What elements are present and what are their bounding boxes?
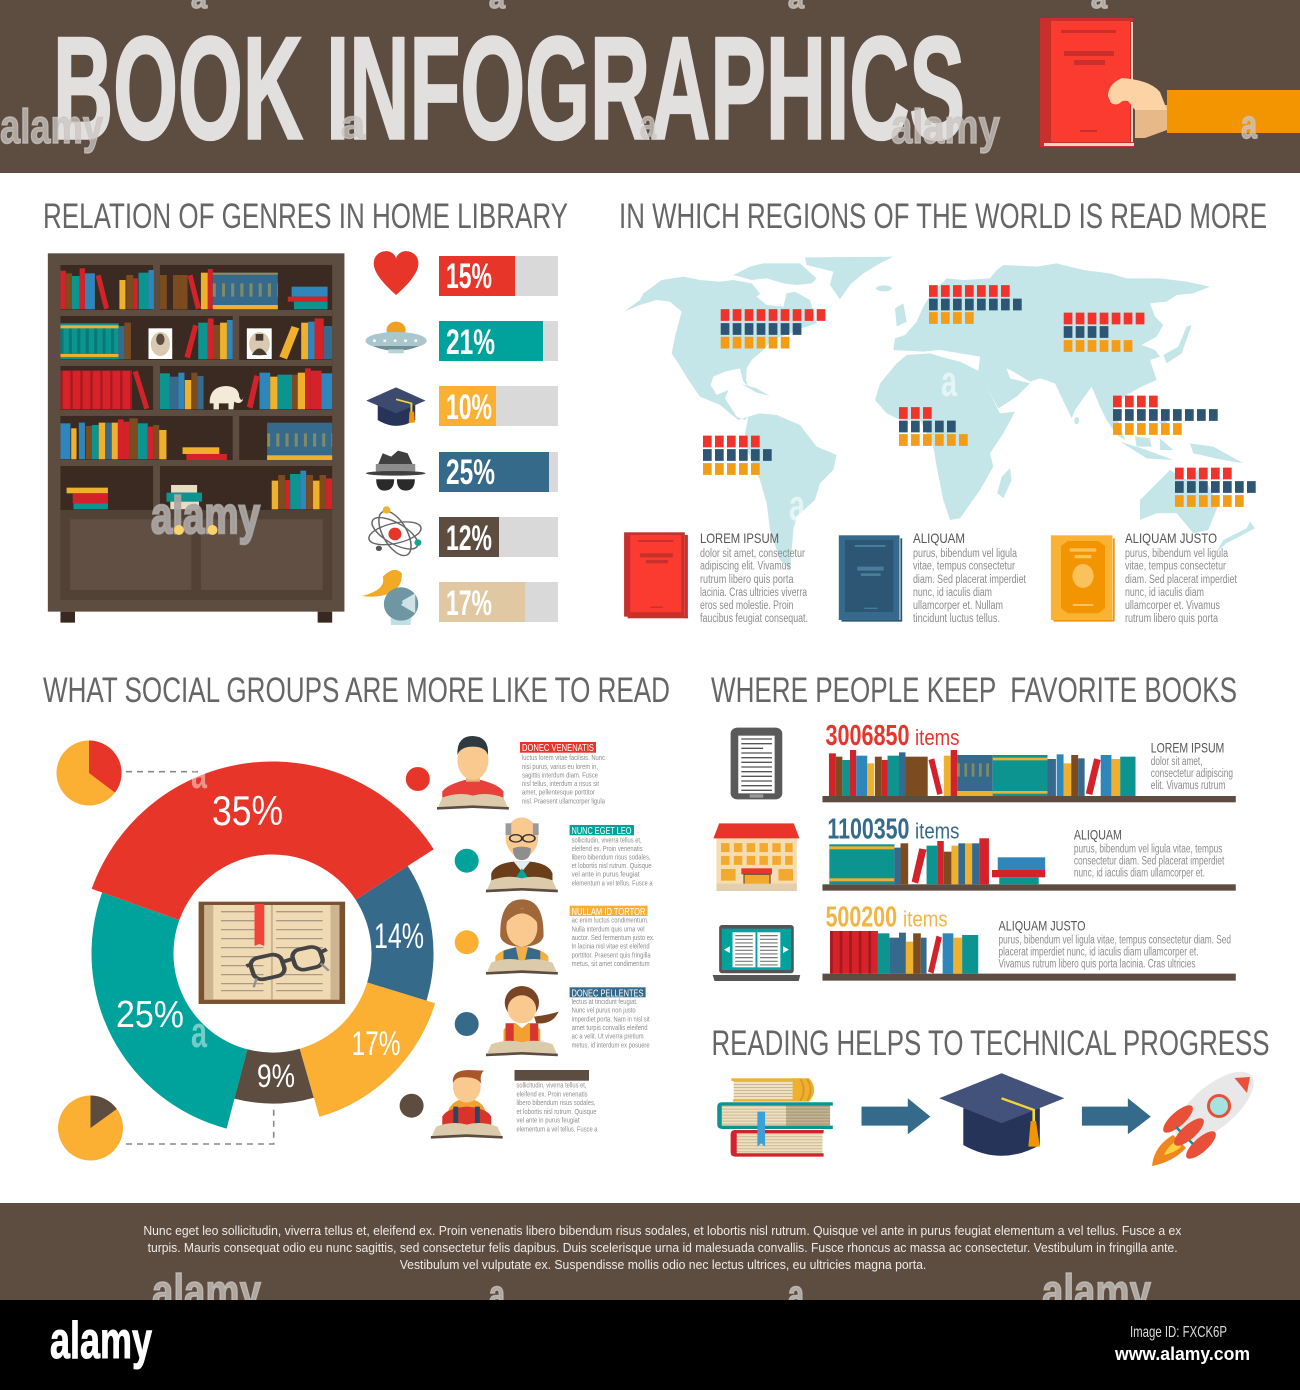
- text block: brown label: sollicitudin, viverra tellus et,: [516, 1081, 586, 1090]
- legend text: lorem ipsum: eros sed molestie. Proin: [700, 600, 794, 612]
- legend text: aliquam: ALIQUAM: [913, 530, 965, 546]
- text block: brown label: eleifend ex. Proin venenatis: [516, 1090, 588, 1099]
- icon: atom: [366, 506, 424, 560]
- count: 1100350 items: items: [915, 818, 960, 843]
- map watermarks: a: [941, 357, 957, 406]
- marker dots: [400, 767, 479, 1118]
- legend text: aliquam: ullamcorper et. Nullam: [913, 600, 1003, 612]
- text block: donec venenatis: nisl. Praesent ullamcorper ligula: [522, 796, 606, 805]
- books row 1: [60, 268, 328, 309]
- text block: donec venenatis: nisi purus, varius eu lorem in,: [522, 762, 598, 771]
- legend text: lorem ipsum: adipiscing elit. Vivamus: [700, 560, 791, 572]
- legend text: aliquam justo: vitae, tempus consectetur: [1125, 560, 1226, 572]
- segment 25%: [92, 892, 247, 1129]
- icon: city library: [713, 823, 800, 891]
- map data: africa: [899, 413, 968, 440]
- shelf text: aliquam: purus, bibendum vel ligula vitae, tempus: [1074, 843, 1223, 855]
- footer band: [0, 1203, 1300, 1319]
- alamy logo: alamy: [50, 1312, 152, 1370]
- text block: donec venenatis: DONEC VENENATIS: [522, 743, 594, 754]
- legend text: aliquam justo: diam. Sed placerat imperdiet: [1125, 574, 1238, 586]
- shelf text: lorem ipsum: elit. Vivamus rutrum: [1151, 780, 1225, 792]
- text block: nunc eget leo: NUNC EGET LEO: [572, 826, 632, 837]
- footer watermarks: [152, 1266, 1151, 1319]
- text block: nullam id tortor: metus, sit amet condimentum: [572, 959, 650, 968]
- text block: nullam id tortor: ac enim luctus condimentum.: [572, 916, 649, 925]
- donut watermarks: a: [191, 1008, 207, 1057]
- donut watermarks: [191, 749, 207, 1057]
- legend text: aliquam: tincidunt luctus tellus.: [913, 613, 1000, 625]
- donut watermarks: a: [191, 749, 207, 798]
- count: 500200 items: 500200: [826, 902, 897, 934]
- icon: knight helmet: [362, 570, 418, 625]
- icon: laptop e-book: [713, 925, 800, 981]
- shelf text: aliquam justo: ALIQUAM JUSTO: [998, 918, 1086, 934]
- map data: australia: [1175, 474, 1256, 501]
- shelf text: aliquam justo: Vivamus rutrum libero quis porta lacinia. Cras ultricies: [998, 958, 1196, 970]
- segment 17%: [300, 982, 435, 1117]
- shelf text: aliquam: [1074, 826, 1225, 880]
- bar: fantasy 17%: [439, 582, 558, 623]
- count: 500200 items: items: [903, 907, 948, 932]
- legend text: aliquam: purus, bibendum vel ligula: [913, 548, 1017, 560]
- bar: detective 25%: 25%: [446, 453, 495, 492]
- person: elderly man: [486, 817, 558, 892]
- shelf text: aliquam: consectetur diam. Sed placerat imperdiet: [1074, 855, 1225, 867]
- legend text: aliquam justo: rutrum libero quis porta: [1125, 613, 1218, 625]
- text block: brown label: et lobortis nisl rutrum. Quisque: [516, 1107, 596, 1116]
- text block: brown label: elementum a vel tellus. Fusce a: [516, 1124, 598, 1133]
- bar: science 12%: [439, 517, 558, 558]
- legend books: [624, 532, 1115, 622]
- text block: donec pellentes: imperdiet porta. Nam in nisl sit: [572, 1014, 650, 1023]
- legend text: lorem ipsum: LOREM IPSUM: [700, 530, 779, 546]
- icon: red book: [624, 532, 688, 618]
- text block: nullam id tortor: NULLAM ID TORTOR: [572, 907, 646, 918]
- credit bar: [0, 1300, 1300, 1390]
- icon: rocket: [1152, 1060, 1265, 1166]
- shelf text: aliquam: ALIQUAM: [1074, 826, 1122, 842]
- small pie: top: [56, 740, 122, 806]
- text block: donec venenatis: nisl tellus, interdum a risus sit: [522, 779, 600, 788]
- text block: nullam id tortor: auctor. Sed fermentum justo ex.: [572, 933, 655, 942]
- header band: [0, 0, 1300, 173]
- bar: sci-fi 21%: 21%: [446, 323, 495, 362]
- bar: education 10%: 10%: [446, 388, 492, 427]
- footer watermarks: alamy: [152, 1266, 261, 1319]
- donut chart: [92, 761, 435, 1129]
- legend text: aliquam justo: ALIQUAM JUSTO: [1125, 530, 1217, 546]
- genre bars panel: [439, 256, 558, 623]
- icon: blue book: [839, 535, 902, 622]
- count: 3006850 items: 3006850: [826, 720, 910, 752]
- map watermarks: a: [789, 481, 805, 530]
- legend text: aliquam: [913, 530, 1027, 625]
- icon: open book with glasses: [199, 902, 345, 1004]
- text block: brown label: vel ante in purus feugiat: [516, 1116, 580, 1125]
- americas: [624, 257, 893, 570]
- text block: donec pellentes: DONEC PELLENTES: [572, 988, 644, 999]
- text block: nunc eget leo: sollicitudin, viverra tellus et,: [572, 835, 642, 844]
- watermarks: a: [1241, 103, 1258, 147]
- shelf 2: [822, 838, 1236, 891]
- icon: e-reader: [731, 728, 782, 799]
- shelf 3: [822, 931, 1236, 981]
- shelf text: lorem ipsum: consectetur adipiscing: [1151, 768, 1233, 780]
- shelf text: aliquam justo: placerat imperdiet nunc, id iaculis diam ullamcorper et.: [998, 946, 1198, 958]
- text block: nullam id tortor: Nulla interdum quis urna vel: [572, 924, 645, 933]
- text block: nunc eget leo: elementum a vel tellus. Fusce a: [572, 878, 653, 887]
- shelf text: lorem ipsum: LOREM IPSUM: [1151, 739, 1224, 755]
- person portraits: [431, 736, 559, 1139]
- legend text: lorem ipsum: lacinia. Cras ultricies viverra: [700, 587, 807, 599]
- icon: heart: [374, 251, 418, 295]
- footer watermarks: a: [788, 1273, 805, 1317]
- heading: genres: RELATION OF GENRES IN HOME LIBRARY: [43, 197, 568, 236]
- segment 35%: 35%: [212, 787, 283, 834]
- count: 3006850 items: items: [915, 725, 960, 750]
- map data: south-east asia: [1113, 402, 1218, 429]
- shelf text: aliquam justo: [998, 918, 1231, 970]
- segment 25%: 25%: [116, 994, 184, 1036]
- bar: love 15%: 15%: [446, 257, 492, 296]
- legend text: aliquam: nunc, id iaculis diam: [913, 587, 992, 599]
- text block: nunc eget leo: et lobortis nisl rutrum. Quisque: [572, 861, 652, 870]
- text block: donec pellentes: Nunc vel purus non justo: [572, 1006, 636, 1015]
- segment 17%: 17%: [352, 1025, 400, 1063]
- legend text: lorem ipsum: rutrum libero quis porta: [700, 574, 794, 586]
- legend text: lorem ipsum: faucibus feugiat consequat.: [700, 613, 808, 625]
- watermarks: a: [640, 103, 657, 147]
- footer text: [143, 1223, 1182, 1272]
- person: young man: [437, 736, 509, 810]
- bar: sci-fi 21%: [439, 321, 558, 362]
- segment 9%: [234, 1049, 314, 1104]
- footer text: turpis. Mauris consequat odio eu nunc sagittis, sed consectetur felis dapibus. Duis scelerisque urna id malesuada convallis. Fusce rhoncus ac massa ac consectetur. Vestibulum in fringilla ante.: [148, 1240, 1178, 1255]
- text block: nullam id tortor: [570, 906, 655, 968]
- icon: ufo: [365, 322, 427, 353]
- person: schoolgirl: [486, 986, 559, 1056]
- icon: hand holding red book: [1040, 18, 1300, 147]
- site url: www.alamy.com: [1114, 1344, 1250, 1364]
- shelf text: aliquam: nunc, id iaculis diam ullamcorper et.: [1074, 868, 1205, 880]
- legend text: lorem ipsum: dolor sit amet, consectetur: [700, 548, 805, 560]
- text block: donec venenatis: luctus lorem vitae facilisis. Nunc: [522, 753, 605, 762]
- text block: nunc eget leo: [570, 825, 653, 887]
- world map: [624, 257, 1255, 570]
- arrow 2: [1082, 1098, 1151, 1134]
- progress row: [717, 1073, 1151, 1157]
- map watermarks: [789, 357, 957, 530]
- legend text: aliquam justo: ullamcorper et. Vivamus: [1125, 600, 1220, 612]
- shelf text: lorem ipsum: [1151, 739, 1233, 792]
- legend text: aliquam justo: purus, bibendum vel ligula: [1125, 548, 1228, 560]
- text block: donec venenatis: sagittis interdum diam. Fusce: [522, 770, 598, 780]
- segment 35%: [92, 761, 434, 920]
- footer text: Nunc eget leo sollicitudin, viverra tellus et, eleifend ex. Proin venenatis libero bibendum risus sodales, et lobortis nisl rutrum. Quisque vel ante in purus feugiat elementum a vel tellus. Fusce a ex: [143, 1223, 1182, 1238]
- watermarks: [0, 0, 1258, 154]
- bar: love 15%: [439, 256, 558, 296]
- shelf text: lorem ipsum: dolor sit amet,: [1151, 756, 1202, 768]
- footer watermarks: a: [489, 1273, 506, 1317]
- heading: social groups: WHAT SOCIAL GROUPS ARE MORE LIKE TO READ: [43, 671, 670, 710]
- icon: graduation cap: [939, 1073, 1064, 1156]
- icon: spy: [366, 451, 426, 491]
- genre icons: [362, 251, 427, 625]
- person: schoolboy: [431, 1070, 503, 1139]
- count: 1100350 items: 1100350: [827, 813, 909, 845]
- text block: donec pellentes: lectus at tincidunt feugiat.: [572, 997, 638, 1006]
- text block: donec pellentes: metus, id interdum ex posuere: [572, 1040, 650, 1049]
- shelf 1: [822, 750, 1236, 802]
- text block: nunc eget leo: vel ante in purus feugiat: [572, 870, 640, 879]
- segment 14%: 14%: [374, 917, 424, 956]
- icon: stack of books: [717, 1078, 833, 1157]
- person: woman: [486, 899, 558, 975]
- legend text: aliquam: diam. Sed placerat imperdiet: [913, 574, 1027, 586]
- small pie: bottom: [58, 1096, 123, 1160]
- watermarks: a: [341, 103, 366, 147]
- cabinet knobs: [174, 525, 218, 535]
- text block: donec venenatis: amet, pellentesque porttitor: [522, 788, 595, 797]
- watermarks: alamy: [0, 101, 103, 154]
- footer watermarks: alamy: [1042, 1266, 1151, 1319]
- text block: donec venenatis: [520, 742, 606, 805]
- watermarks: alamy: [891, 101, 1000, 154]
- bar: detective 25%: [439, 452, 558, 492]
- text block: nunc eget leo: eleifend ex. Proin venenatis: [572, 844, 643, 853]
- map data: europe: [929, 291, 1022, 318]
- map data: south america: [703, 442, 772, 469]
- books row 5: [67, 471, 332, 509]
- books row 2: [60, 318, 332, 359]
- icon: graduation cap: [366, 387, 426, 426]
- legend text: aliquam justo: [1125, 530, 1238, 625]
- bookcase illustration: [48, 253, 344, 623]
- bookcase watermark: alamy: [151, 487, 260, 545]
- bar: science 12%: 12%: [446, 519, 492, 558]
- africa eurasia oceania: [875, 263, 1255, 552]
- text block: nunc eget leo: libero bibendum risus sodales,: [572, 852, 651, 861]
- books row 3: [60, 368, 332, 409]
- bar: fantasy 17%: 17%: [446, 584, 492, 623]
- legend text: lorem ipsum: [700, 530, 808, 625]
- footer text: Vestibulum vel vulputate ex. Suspendisse mollis odio nec lectus ultrices, eu ultricies magna porta.: [400, 1257, 926, 1272]
- text block: brown label: [514, 1070, 598, 1133]
- legend text: aliquam: vitae, tempus consectetur: [913, 560, 1015, 572]
- image id: Image ID: FXCK6P: [1130, 1324, 1227, 1341]
- map data: north america: [721, 315, 825, 343]
- icon: orange book: [1051, 535, 1115, 622]
- books row 4: [60, 418, 332, 460]
- text block: donec pellentes: ac a velit. Ut viverra pretium: [572, 1032, 644, 1041]
- segment 14%: [356, 866, 434, 1001]
- arrow 1: [861, 1098, 930, 1134]
- bar: education 10%: [439, 386, 558, 427]
- map data: asia: [1064, 318, 1144, 346]
- text block: nullam id tortor: In lacinia nisl vitae est eleifend: [572, 942, 650, 951]
- text block: brown label: libero bibendum risus sodales,: [516, 1098, 596, 1107]
- text block: donec pellentes: amet turpis convallis eleifend: [572, 1023, 648, 1032]
- text block: donec pellentes: [570, 987, 650, 1049]
- favorite books panel: [713, 728, 1236, 981]
- segment 9%: 9%: [257, 1058, 295, 1094]
- legend text: aliquam justo: nunc, id iaculis diam: [1125, 587, 1204, 599]
- text block: nullam id tortor: porttitor. Praesent quis fringilla: [572, 950, 651, 959]
